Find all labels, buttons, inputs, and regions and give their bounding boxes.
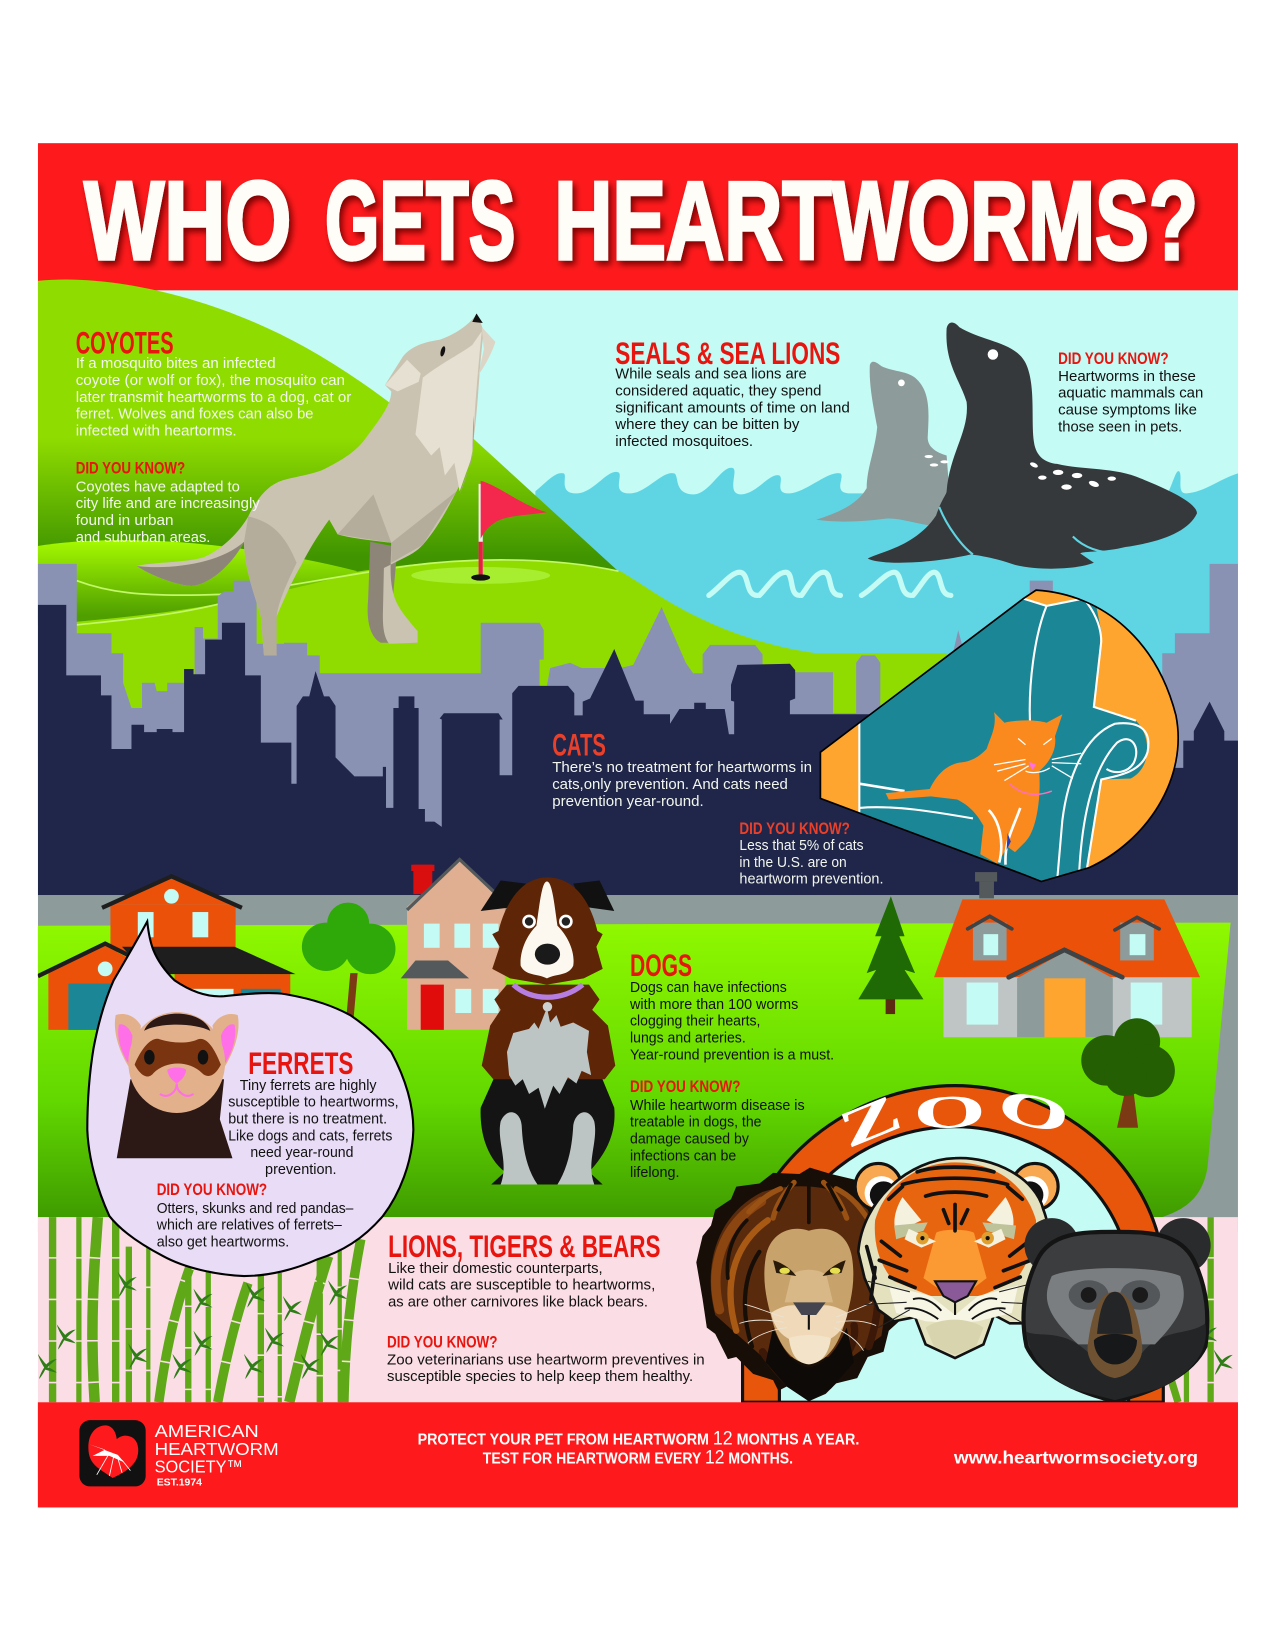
text: coyotes body: infected with heartorms. [76,423,237,440]
dog eyes [522,915,573,928]
text: seals did you know: aquatic mammals can [1058,385,1203,402]
text: seals body: infected mosquitoes. [615,433,753,450]
zoo sign text: Z [831,1083,910,1160]
infographic poster [38,143,1238,1508]
text: zoo did you know [387,1333,705,1385]
lion whiskers [739,1302,876,1351]
tiger eyes [905,1229,1006,1248]
text: coyotes body: If a mosquito bites an infected [76,355,276,372]
cat spotlight [820,579,1199,882]
text: cats did you know: DID YOU KNOW? [739,819,850,838]
text: seals body: where they can be bitten by [614,416,800,433]
cat face details [989,738,1081,865]
text: zoo did you know: Zoo veterinarians use heartworm preventives in [387,1351,705,1368]
wolf eye [440,346,446,356]
zoo sign text [831,1078,1075,1160]
tiger muzzle [889,1285,1018,1323]
panel: ferret speech bubble [87,922,413,1276]
text: cats body: prevention year-round. [552,793,704,810]
text: dogs body: Dogs can have infections [630,979,787,996]
panel: lions tigers bears text [387,1228,705,1385]
text: dogs did you know: While heartworm disease is [630,1097,805,1114]
text: zoo body [387,1260,655,1311]
text: dogs did you know: infections can be [630,1147,736,1164]
dog head [492,877,603,985]
tiger head base [858,1158,1054,1358]
lawn [38,923,1231,1217]
right tree [1081,1018,1175,1128]
title: GETS [325,158,515,283]
panel: seals text [614,335,1203,450]
right house [934,872,1200,1037]
text: dogs did you know: lifelong. [630,1164,679,1181]
bamboo leaves [38,1272,1233,1379]
lion beard [766,1328,854,1401]
text: ferrets body: Tiny ferrets are highly [240,1077,377,1094]
text: dogs did you know [630,1077,805,1181]
wolf far leg [368,542,418,643]
text: ferrets did you know [156,1180,354,1251]
organisation name [155,1421,279,1488]
tiger whiskers [865,1281,1043,1328]
panel: cats text [552,726,884,888]
skyline: navy buildings [38,605,1238,895]
skyline: far grey buildings [38,564,926,831]
text: coyotes did you know: city life and are increasingly [76,495,260,512]
golf hill with dark mountain slope [38,279,631,621]
dog grey paws [500,1112,595,1185]
text: ferrets did you know: also get heartworms. [157,1234,289,1251]
wolf body [137,313,484,655]
text: seals body: significant amounts of time on land [615,399,850,416]
text: ferrets body: prevention. [265,1161,337,1178]
text: cats body: cats,only prevention. And cats need [552,776,788,793]
text: cats body [552,759,812,810]
pine tree [858,896,923,1014]
footer-free banner: title band [38,143,1238,290]
heading: ferrets: FERRETS [248,1045,353,1081]
organisation name: SOCIETY™ [155,1457,243,1477]
bear head [1023,1232,1207,1401]
dog collar [513,985,583,997]
heading: lions tigers and bears: LIONS, TIGERS & BEARS [388,1228,661,1264]
tiger [855,1158,1058,1358]
icon: ferret [115,1012,239,1158]
text: ferrets body: but there is no treatment. [228,1110,387,1127]
text: ferrets body [228,1077,399,1178]
text: zoo body: wild cats are susceptible to heartworms, [387,1277,655,1294]
pink house [401,859,505,1030]
tiger stripes [867,1167,1048,1299]
dog brown body [482,985,615,1079]
bamboo grove [53,1217,1211,1402]
text: ferrets did you know: DID YOU KNOW? [157,1180,267,1199]
dog blaze and muzzle [521,882,574,978]
tiger ears [855,1163,901,1210]
text: coyotes did you know: and suburban areas. [76,529,210,546]
dog chest fur [507,1008,591,1109]
orange wall [821,591,1178,868]
panel: coyotes text [76,324,351,546]
text: coyotes did you know [76,458,260,546]
text: cats did you know [739,819,884,888]
pink band [38,1217,1238,1402]
flag [471,481,547,581]
text: seals did you know: Heartworms in these [1058,368,1196,385]
bear [1023,1218,1211,1401]
ground land [38,560,947,757]
text: ferrets body: need year-round [250,1144,353,1161]
bear snout [1088,1292,1142,1378]
text: coyotes body: later transmit heartworms to a dog, cat or [76,389,351,406]
text: cats body: There’s no treatment for heartworms in [552,759,812,776]
panel: dogs text [629,947,834,1181]
lion face [764,1229,853,1363]
red house [38,876,296,1030]
text: seals body: considered aquatic, they spend [615,383,821,400]
text: seals body [614,366,850,450]
text: dogs body: lungs and arteries. [630,1029,746,1046]
organisation name: HEARTWORM [155,1439,279,1459]
lion mane streaks [716,1176,878,1383]
heading: cats: CATS [552,726,606,762]
grey seal [816,362,952,526]
road band [38,895,1238,1232]
dog [481,877,615,1185]
text: coyotes did you know: Coyotes have adapted to [76,478,240,495]
text: dogs body: Year-round prevention is a must. [630,1046,834,1063]
wolf tail shade [137,542,244,586]
fairway outlines [77,560,618,625]
icon: heartworm society logo [79,1420,146,1486]
text: zoo body: Like their domestic counterparts, [388,1260,603,1277]
title: WHO [84,158,291,283]
wolf ear [385,360,421,391]
wolf nose [472,313,483,323]
zoo sign text: O [993,1078,1075,1144]
dog ears [481,880,614,911]
zoo sign text: O [913,1085,987,1139]
text: seals body: While seals and sea lions are [615,366,807,383]
heading: coyotes: COYOTES [76,324,174,360]
left tree [302,903,395,1020]
text: seals did you know: cause symptoms like [1058,401,1197,418]
wolf jaw [479,327,495,374]
spotlight outline [820,590,1178,882]
footer message: TEST FOR HEARTWORM EVERY 12 MONTHS. [483,1447,793,1468]
fairway [38,540,358,625]
heading: seals and sea lions: SEALS & SEA LIONS [615,335,840,371]
footer band [38,1402,1238,1507]
footer message: PROTECT YOUR PET FROM HEARTWORM 12 MONTHS A YEAR. [418,1428,859,1449]
dog black legs base [481,1077,615,1185]
text: cats did you know: in the U.S. are on [739,854,847,871]
text: zoo did you know: susceptible species to help keep them healthy. [387,1368,693,1385]
wolf haunch shade [244,517,297,655]
zoo gate arch [743,1078,1163,1402]
organisation name: AMERICAN [155,1421,259,1441]
text: dogs did you know: treatable in dogs, the [630,1114,762,1131]
text: seals did you know: those seen in pets. [1058,418,1182,435]
dark seal [868,323,1197,569]
bear lower dark [1027,1323,1206,1400]
chair outlines [859,599,1148,882]
lion mane fill [711,1186,885,1357]
wolf [137,313,495,655]
text: ferrets body: susceptible to heartworms, [228,1094,399,1111]
bear grey mask [1047,1268,1184,1344]
website: www.heartwormsociety.org [953,1447,1198,1467]
organisation name: EST.1974 [157,1477,202,1488]
footer message [418,1428,859,1468]
text: zoo body: as are other carnivores like black bears. [388,1294,648,1311]
putting green [411,567,550,584]
text: cats did you know: heartworm prevention. [739,871,884,888]
background: water with waves [535,468,1238,799]
text: ferrets did you know: Otters, skunks and red pandas– [157,1200,354,1217]
wolf ruff [415,331,482,491]
text: coyotes body: ferret. Wolves and foxes can also be [76,406,313,423]
text: dogs did you know: DID YOU KNOW? [630,1077,740,1096]
text: coyotes body: coyote (or wolf or fox), the mosquito can [76,372,345,389]
small wave lines [709,572,951,595]
text: dogs did you know: damage caused by [630,1130,749,1147]
text: dogs body [629,979,834,1063]
text: coyotes did you know: found in urban [76,512,174,529]
heading: dogs: DOGS [630,947,692,983]
text: ferrets body: Like dogs and cats, ferrets [228,1127,392,1144]
text: seals did you know: DID YOU KNOW? [1058,349,1169,368]
cat [886,712,1062,864]
background: sky [157,290,1238,496]
lion [696,1168,900,1401]
text: coyotes body [76,355,351,440]
text: dogs body: clogging their hearts, [630,1013,760,1030]
text: coyotes did you know: DID YOU KNOW? [76,458,185,477]
text: seals did you know [1058,349,1203,435]
text: ferrets did you know: which are relatives of ferrets– [156,1217,342,1234]
skyline: grey right side [952,564,1238,778]
text: zoo did you know: DID YOU KNOW? [387,1333,498,1352]
text: dogs body: with more than 100 worms [629,996,798,1013]
text: cats did you know: Less that 5% of cats [739,837,864,854]
tiger white brow [894,1197,1014,1233]
title [84,158,1198,283]
tiger orange face [875,1162,1036,1296]
